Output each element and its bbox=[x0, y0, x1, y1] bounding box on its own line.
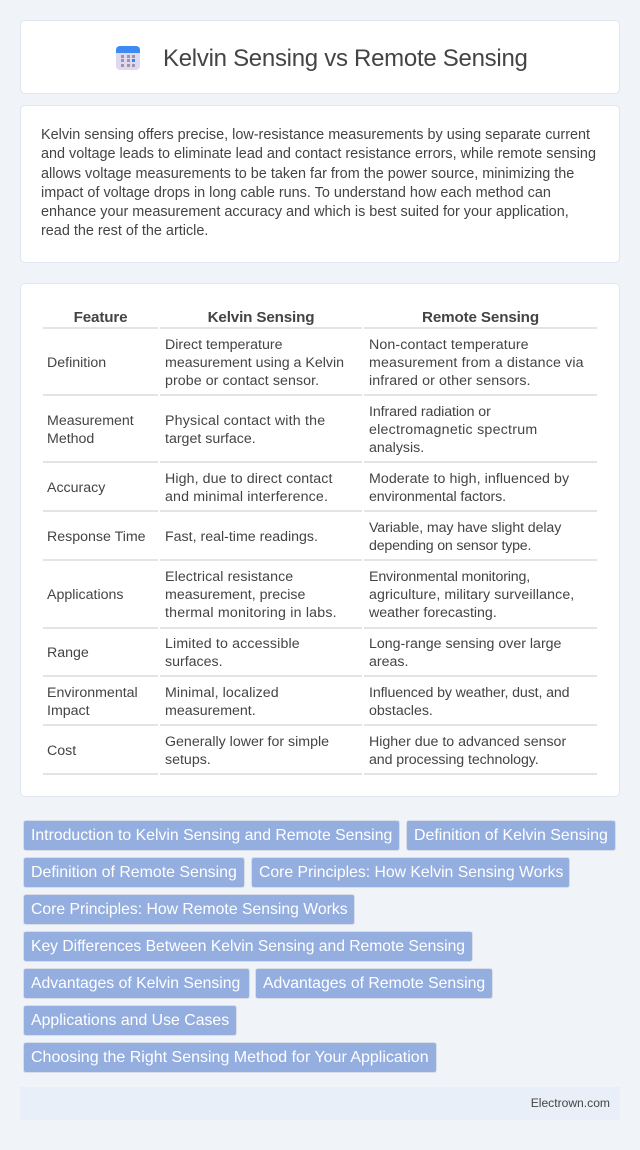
intro text: read the rest of the article. bbox=[41, 223, 208, 239]
icon: calendar bbox=[116, 46, 140, 70]
row: Definition: Non-contact temperature bbox=[369, 337, 529, 353]
row: Applications: agriculture, military surveillance, bbox=[369, 587, 574, 603]
row: Definition: measurement from a distance via bbox=[369, 355, 584, 371]
table header: Remote Sensing bbox=[422, 309, 539, 326]
row: Definition: Direct temperature bbox=[165, 337, 282, 353]
row: Cost: Higher due to advanced sensor bbox=[369, 734, 566, 750]
row: Response Time: Fast, real-time readings. bbox=[165, 529, 318, 545]
footer bbox=[20, 1087, 620, 1120]
intro text: enhance your measurement accuracy and which is best suited for your application, bbox=[41, 204, 569, 220]
title: Kelvin Sensing vs Remote Sensing bbox=[163, 45, 528, 72]
row: Measurement Method: Physical contact with the bbox=[165, 413, 325, 429]
row: Range bbox=[43, 636, 597, 677]
row: Environmental Impact: Impact bbox=[47, 703, 90, 719]
row: Measurement Method: Measurement bbox=[47, 413, 134, 429]
row: Cost: Generally lower for simple bbox=[165, 734, 329, 750]
intro text: and voltage leads to eliminate lead and contact resistance errors, while remote sensing bbox=[41, 146, 596, 162]
row: Environmental Impact bbox=[43, 685, 597, 726]
row: Range: Range bbox=[47, 645, 89, 661]
row: Measurement Method: Method bbox=[47, 431, 94, 447]
row: Measurement Method: analysis. bbox=[369, 440, 424, 456]
row: Environmental Impact: Minimal, localized bbox=[165, 685, 279, 701]
row: Accuracy: Accuracy bbox=[47, 480, 105, 496]
row: Applications: thermal monitoring in labs. bbox=[165, 605, 337, 621]
row: Environmental Impact: measurement. bbox=[165, 703, 256, 719]
intro text bbox=[41, 127, 596, 239]
row: Applications bbox=[43, 569, 597, 629]
topic tags: Definition of Kelvin Sensing bbox=[414, 827, 608, 844]
row: Accuracy bbox=[43, 471, 597, 512]
footer credit: Electrown.com bbox=[531, 1096, 610, 1110]
row: Applications: Electrical resistance bbox=[165, 569, 293, 585]
topic tags: Core Principles: How Remote Sensing Works bbox=[31, 901, 348, 918]
row: Cost: Cost bbox=[47, 743, 76, 759]
row: Applications: Applications bbox=[47, 587, 124, 603]
table header: Feature bbox=[74, 309, 127, 326]
topic tags: Applications and Use Cases bbox=[31, 1012, 229, 1029]
row: Definition: probe or contact sensor. bbox=[165, 373, 319, 389]
row: Applications: Environmental monitoring, bbox=[369, 569, 530, 585]
row: Range: Long-range sensing over large bbox=[369, 636, 561, 652]
row: Definition: Definition bbox=[47, 355, 106, 371]
row: Cost bbox=[43, 734, 597, 775]
intro text: Kelvin sensing offers precise, low-resistance measurements by using separate current bbox=[41, 127, 590, 143]
row: Cost: setups. bbox=[165, 752, 211, 768]
row: Accuracy: and minimal interference. bbox=[165, 489, 328, 505]
row: Measurement Method: electromagnetic spectrum bbox=[369, 422, 537, 438]
row: Range: surfaces. bbox=[165, 654, 223, 670]
row: Cost: and processing technology. bbox=[369, 752, 539, 768]
row: Measurement Method: target surface. bbox=[165, 431, 256, 447]
row: Definition: infrared or other sensors. bbox=[369, 373, 531, 389]
row: Measurement Method: Infrared radiation or bbox=[369, 404, 491, 420]
topic tags: Advantages of Remote Sensing bbox=[263, 975, 485, 992]
row: Response Time bbox=[43, 520, 597, 561]
table header: Kelvin Sensing bbox=[208, 309, 314, 326]
row: Definition: measurement using a Kelvin bbox=[165, 355, 344, 371]
row: Accuracy: Moderate to high, influenced by bbox=[369, 471, 569, 487]
topic tags: Introduction to Kelvin Sensing and Remote Sensing bbox=[31, 827, 392, 844]
topic tags: Advantages of Kelvin Sensing bbox=[31, 975, 240, 992]
row: Applications: weather forecasting. bbox=[369, 605, 497, 621]
row: Environmental Impact: Influenced by weather, dust, and bbox=[369, 685, 569, 701]
topic tags: Key Differences Between Kelvin Sensing and Remote Sensing bbox=[31, 938, 465, 955]
topic tags: Core Principles: How Kelvin Sensing Works bbox=[259, 864, 563, 881]
row: Environmental Impact: Environmental bbox=[47, 685, 138, 701]
row: Response Time: depending on sensor type. bbox=[369, 538, 531, 554]
row: Definition bbox=[43, 337, 597, 396]
row: Accuracy: High, due to direct contact bbox=[165, 471, 333, 487]
intro text: impact of voltage drops in long cable runs. To understand how each method can bbox=[41, 185, 551, 201]
row: Environmental Impact: obstacles. bbox=[369, 703, 433, 719]
header card bbox=[20, 20, 620, 94]
panel: comparison table bbox=[20, 283, 620, 797]
table header bbox=[43, 309, 597, 329]
row: Applications: measurement, precise bbox=[165, 587, 305, 603]
row: Measurement Method bbox=[43, 404, 597, 463]
topic tags: Choosing the Right Sensing Method for Your Application bbox=[31, 1049, 429, 1066]
row: Response Time: Variable, may have slight delay bbox=[369, 520, 561, 536]
row: Range: Limited to accessible bbox=[165, 636, 300, 652]
row: Response Time: Response Time bbox=[47, 529, 146, 545]
row: Accuracy: environmental factors. bbox=[369, 489, 506, 505]
row: Range: areas. bbox=[369, 654, 408, 670]
panel: intro bbox=[20, 105, 620, 263]
topic tags: Definition of Remote Sensing bbox=[31, 864, 237, 881]
intro text: allows voltage measurements to be taken far from the power source, minimizing the bbox=[41, 166, 574, 182]
